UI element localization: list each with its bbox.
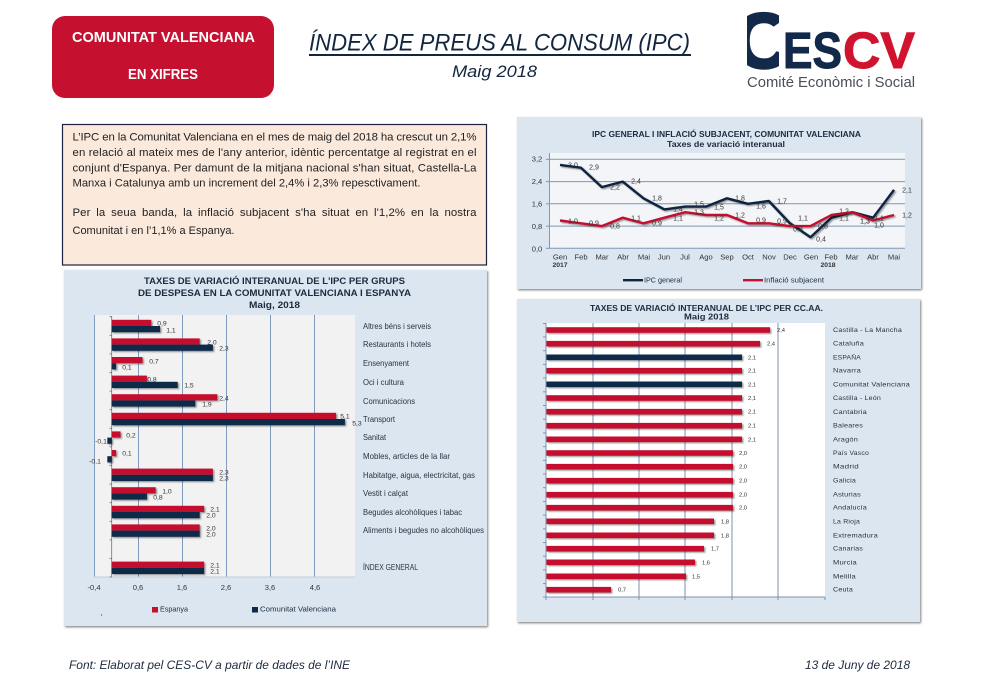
line chart x axis: Nov <box>762 252 776 262</box>
line chart x axis: Sep <box>720 252 734 262</box>
bar chart x axis: 1,6 <box>177 583 187 592</box>
regional category labels: Aragón <box>833 436 858 443</box>
bar chart data labels: 2,4 <box>219 396 229 402</box>
line chart data labels: 1,2 <box>714 216 724 222</box>
regional bars <box>546 327 770 592</box>
line chart data labels: 1,3 <box>860 218 870 226</box>
bar chart legend: Espanya <box>160 604 189 614</box>
line chart data labels: 0,9 <box>756 218 766 224</box>
line chart y axis: 1,6 <box>532 200 542 208</box>
title <box>309 30 691 81</box>
line chart data labels: 1,1 <box>839 216 849 222</box>
badge: Comunitat Valenciana en xifres <box>52 16 274 98</box>
line: IPC general <box>560 165 894 237</box>
line chart data labels: 0,9 <box>652 220 662 228</box>
regional data labels: 2,0 <box>739 451 747 457</box>
bar chart data labels: 2,3 <box>219 476 229 482</box>
bar chart x axis: 2,6 <box>221 583 231 592</box>
line chart y axis: 0,0 <box>532 244 542 254</box>
line chart x axis: Feb <box>574 252 588 262</box>
text block: summary: Comunitat i en l’1,1% a Espanya. <box>72 225 234 237</box>
regional category labels: Galicia <box>833 478 856 484</box>
regional data labels: 2,4 <box>777 328 786 334</box>
title: Maig 2018 <box>452 62 538 81</box>
line chart data labels: 1,3 <box>694 210 704 216</box>
title: ÍNDEX DE PREUS AL CONSUM (IPC) <box>309 30 690 56</box>
bars: Espanya <box>112 320 336 568</box>
line chart data labels: 1,2 <box>839 208 849 216</box>
regional category labels: ESPAÑA <box>833 352 861 362</box>
line chart x axis: Dec <box>783 252 797 262</box>
bar chart legend: Comunitat Valenciana <box>260 604 337 614</box>
line chart data labels: 1,0 <box>568 218 578 226</box>
bar chart data labels: 2,3 <box>219 470 229 476</box>
text block: summary: en relació al mateix mes de l'any anterior, idèntic percentatge al registrat en el <box>72 147 476 159</box>
badge: Comunitat Valenciana en xifres: EN XIFRES <box>128 66 198 83</box>
line chart data labels: 1,7 <box>777 198 787 206</box>
line chart x axis: Gen <box>804 252 818 262</box>
bar chart data labels: 2,0 <box>207 340 217 346</box>
regional category labels: Castilla - León <box>833 395 881 402</box>
line chart x axis: 2017 <box>552 262 568 269</box>
line chart x axis: Abr <box>617 252 629 262</box>
line chart data labels: 0,8 <box>793 226 803 234</box>
line chart x axis: Mai <box>638 252 650 262</box>
bar chart data labels: 0,1 <box>122 364 132 372</box>
line chart x axis: Gen <box>553 252 567 262</box>
bar chart x axis: 0,6 <box>133 583 143 592</box>
line chart x axis: Abr <box>867 252 879 262</box>
line chart data labels: 0,8 <box>610 224 620 230</box>
bar chart category labels <box>363 322 484 572</box>
bar chart data labels: 0,8 <box>147 376 157 384</box>
line chart data labels: 0,9 <box>777 218 787 226</box>
bar chart data labels: 2,0 <box>206 532 216 538</box>
bar chart category labels: Oci i cultura <box>363 378 405 387</box>
bar chart data labels: 2,0 <box>206 512 216 520</box>
regional category labels: Ceuta <box>833 586 853 594</box>
bar chart category labels: Vestit i calçat <box>363 489 409 498</box>
line chart title: Taxes de variació interanual <box>667 139 785 149</box>
line chart x axis: Feb <box>824 252 838 262</box>
bar chart category labels: ÍNDEX GENERAL <box>363 563 419 572</box>
logo: CES CV: Comité Econòmic i Social <box>747 74 915 91</box>
bar chart data labels: 0,8 <box>153 494 163 502</box>
line chart x axis <box>552 252 900 269</box>
line chart y axis: 0,8 <box>532 222 542 231</box>
line chart data labels: 1,8 <box>735 196 745 202</box>
regional category labels: Andalucía <box>833 504 867 512</box>
regional category labels: Comunitat Valenciana <box>833 381 910 388</box>
regional data labels: 0,7 <box>618 588 626 594</box>
bar chart data labels: -0,1 <box>89 458 101 466</box>
line chart legend: IPC general <box>644 276 682 284</box>
line chart legend <box>623 276 824 284</box>
bar chart x axis: -0,4 <box>87 583 101 592</box>
bar chart category labels: Begudes alcohòliques i tabac <box>363 508 462 517</box>
regional category labels: Asturias <box>833 492 861 498</box>
bar chart x axis: 4,6 <box>310 583 320 592</box>
line chart data labels: 0,4 <box>816 236 826 244</box>
regional data labels: 1,8 <box>721 533 729 539</box>
bar chart data labels: 0,1 <box>122 450 132 458</box>
bar chart data labels: 0,9 <box>157 320 167 328</box>
bar chart category labels: Mobles, articles de la llar <box>363 452 450 461</box>
line chart data labels: 1,0 <box>874 222 884 230</box>
line chart data labels: 1,8 <box>652 196 662 202</box>
regional category labels: Baleares <box>833 423 863 430</box>
regional data labels: 2,1 <box>748 382 756 388</box>
regional category labels: Melilla <box>833 573 856 580</box>
regional data labels <box>618 328 786 594</box>
line chart data labels: 1,3 <box>860 218 870 226</box>
regional data labels: 2,1 <box>748 437 756 443</box>
line chart legend: Inflació subjacent <box>764 276 824 284</box>
regional category labels: La Rioja <box>833 518 860 526</box>
bar chart x axis <box>87 583 320 592</box>
regional data labels: 2,0 <box>739 479 747 485</box>
text block: summary: Manxa i Catalunya amb un increment del 2,4% i 2,3% repesctivament. <box>72 178 420 190</box>
bar chart category labels: Comunicacions <box>363 397 415 406</box>
regional data labels: 1,6 <box>702 560 710 566</box>
line chart data labels: 3,0 <box>568 162 578 170</box>
bar chart data labels: -0,1 <box>95 438 107 446</box>
text block: summary: conjunt d'Espanya. Per damunt de la mitjana nacional s'han situat, Castella-La <box>72 162 477 174</box>
line chart x axis: Oct <box>742 252 755 262</box>
line chart data labels: 1,2 <box>902 212 912 220</box>
regional data labels: 2,0 <box>739 465 747 471</box>
line chart x axis: Jun <box>658 252 670 262</box>
regional data labels: 2,1 <box>748 424 756 430</box>
regional chart title: Maig 2018 <box>684 312 730 322</box>
panel: bar chart by autonomous community <box>517 299 920 622</box>
regional category labels: Canarias <box>833 546 863 553</box>
bar chart category labels: Sanitat <box>363 433 387 442</box>
regional category labels <box>833 327 910 594</box>
bar chart title: Maig, 2018 <box>249 300 301 311</box>
line chart data labels: 2,2 <box>610 184 620 192</box>
logo: CES CV: CV <box>843 22 915 79</box>
bar chart data labels: 2,1 <box>210 506 220 514</box>
line chart x axis: Mar <box>845 252 859 262</box>
line chart x axis: Mar <box>595 252 609 262</box>
bar chart legend <box>152 604 337 614</box>
panel: line chart IPC general and core inflation <box>517 117 921 289</box>
bar chart category labels: Ensenyament <box>363 359 410 368</box>
line chart data labels: 0,9 <box>589 220 599 228</box>
bar chart x axis: 3,6 <box>265 583 275 592</box>
regional data labels: 1,7 <box>711 547 719 553</box>
footer: source: Font: Elaborat pel CES-CV a partir de dades de l’INE <box>69 658 351 672</box>
bar chart data labels: 5,1 <box>340 414 350 420</box>
regional chart title <box>590 304 823 322</box>
bar chart data labels: 2,1 <box>210 562 220 570</box>
line chart data labels: 1,1 <box>631 216 641 222</box>
bar chart category labels: Transport <box>363 415 396 424</box>
regional data labels: 2,4 <box>767 342 776 348</box>
line chart y axis: 3,2 <box>532 154 542 164</box>
line chart data labels <box>568 162 912 244</box>
regional data labels: 2,1 <box>748 396 756 402</box>
regional category labels: Castilla - La Mancha <box>833 327 902 334</box>
footer: date: 13 de Juny de 2018 <box>805 658 910 672</box>
regional category labels: Madrid <box>833 464 859 471</box>
bar chart title <box>138 275 411 311</box>
bars: Comunitat Valenciana <box>107 326 345 574</box>
line chart data labels: 1,6 <box>756 204 766 210</box>
logo: CES CV: ES <box>783 22 842 79</box>
regional category labels: Extremadura <box>833 532 878 540</box>
line chart data labels: 1,1 <box>874 216 884 222</box>
line chart x axis: Ago <box>699 252 713 262</box>
text block: summary: L’IPC en la Comunitat Valenciana en el mes de maig del 2018 ha crescut un 2,1% <box>72 132 476 144</box>
line chart data labels: 1,5 <box>714 204 724 212</box>
regional data labels: 1,8 <box>721 519 729 525</box>
regional data labels: 2,1 <box>748 369 756 375</box>
line: Inflació subjacent <box>560 212 894 226</box>
line chart data labels: 2,1 <box>902 188 912 194</box>
bar chart data labels: 1,1 <box>166 328 176 334</box>
panel: bar chart by spending group <box>64 270 487 626</box>
bar chart title: TAXES DE VARIACIÓ INTERANUAL DE L'IPC PER GRUPS <box>144 275 406 287</box>
line chart y axis: 2,4 <box>532 177 542 186</box>
regional category labels: País Vasco <box>833 450 869 457</box>
bar chart data labels: 1,0 <box>162 488 172 496</box>
bar chart category labels: Altres béns i serveis <box>363 322 431 331</box>
regional data labels: 1,5 <box>692 574 700 580</box>
regional category labels: Cataluña <box>833 340 864 348</box>
regional category labels: Murcia <box>833 559 857 566</box>
line chart data labels: 1,2 <box>735 212 745 220</box>
bar chart data labels: 2,0 <box>206 526 216 532</box>
line chart data labels: 1,1 <box>798 216 808 222</box>
bar chart title: DE DESPESA EN LA COMUNITAT VALENCIANA I ESPANYA <box>138 288 411 299</box>
logo: CES CV <box>747 12 916 87</box>
regional chart title: TAXES DE VARIACIÓ INTERANUAL DE L’IPC PER CC.AA. <box>590 304 823 313</box>
regional category labels: Cantabria <box>833 409 867 416</box>
regional data labels: 2,1 <box>748 355 756 361</box>
text block: summary <box>62 124 486 265</box>
bar chart data labels: 0,7 <box>149 358 159 366</box>
regional data labels: 2,0 <box>739 493 747 499</box>
line chart data labels: 1,4 <box>673 206 683 214</box>
bar chart data labels <box>89 320 362 576</box>
line chart title: IPC GENERAL I INFLACIÓ SUBJACENT, COMUNITAT VALENCIANA <box>592 128 861 139</box>
line chart data labels: 0,8 <box>818 224 828 230</box>
line chart data labels: 1,5 <box>694 202 704 208</box>
line chart data labels: 2,9 <box>589 164 599 172</box>
line chart x axis: Jul <box>680 252 690 262</box>
regional data labels: 2,0 <box>739 506 747 512</box>
regional data labels: 2,1 <box>748 410 756 416</box>
line chart data labels: 1,1 <box>673 216 683 222</box>
badge: Comunitat Valenciana en xifres: COMUNITAT VALENCIANA <box>72 29 255 46</box>
line chart x axis: 2018 <box>820 262 836 269</box>
line chart title <box>592 128 861 149</box>
bar chart category labels: Restaurants i hotels <box>363 340 431 349</box>
bar chart data labels: 5,3 <box>352 420 362 428</box>
bar chart data labels: 1,5 <box>184 382 194 390</box>
regional category labels: Navarra <box>833 368 861 375</box>
line chart x axis: Mai <box>888 252 900 262</box>
bar chart data labels: 0,2 <box>126 432 136 440</box>
line chart y axis <box>532 154 542 254</box>
bar chart category labels: Aliments i begudes no alcohòliques <box>363 526 484 535</box>
bar chart data labels: 1,9 <box>202 402 212 408</box>
line chart data labels: 2,4 <box>631 178 641 186</box>
bar chart data labels: 2,3 <box>219 346 229 352</box>
text block: summary: Per la seua banda, la inflació subjacent s'ha situat en l'1,2% en la nostra <box>72 207 477 219</box>
bar chart data labels: 2,1 <box>210 568 220 576</box>
bar chart category labels: Habitatge, aigua, electricitat, gas <box>363 471 475 480</box>
